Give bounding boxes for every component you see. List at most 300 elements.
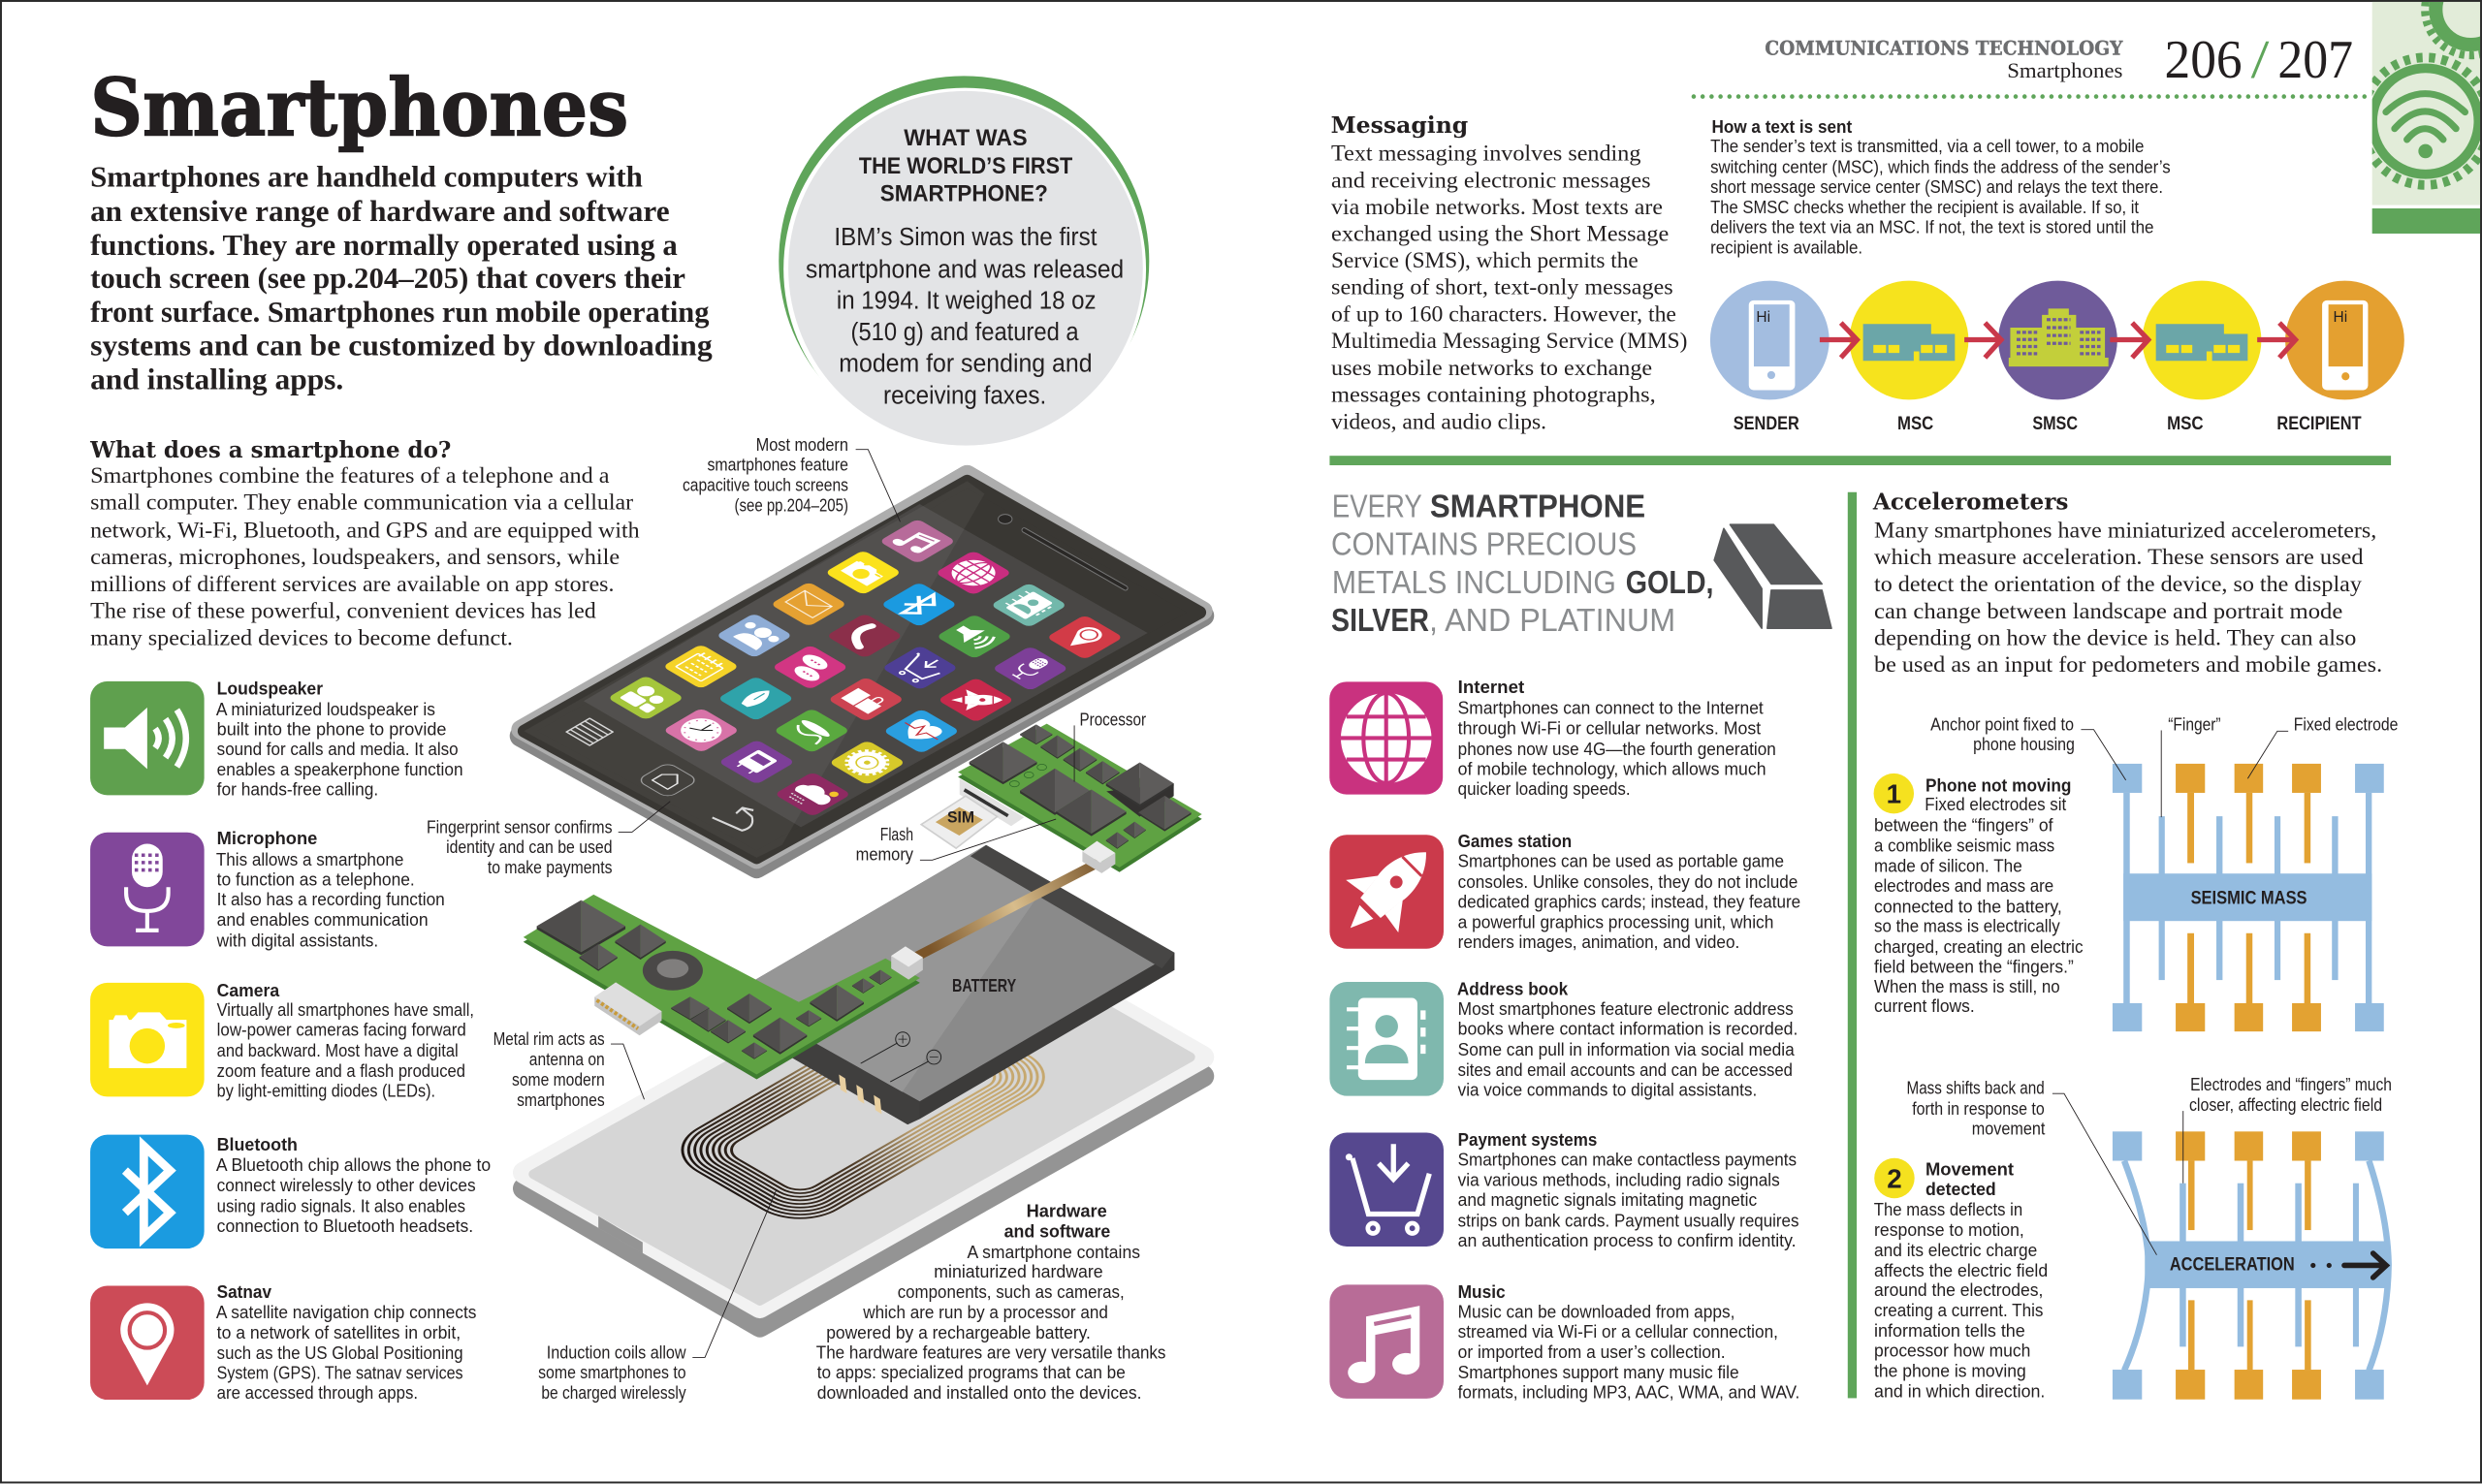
satnav text: A satellite navigation chip connects	[216, 1302, 476, 1322]
battery label: BATTERY	[952, 975, 1017, 995]
app: rocket	[934, 675, 1020, 725]
feature: payment systems	[1329, 1129, 1799, 1250]
step 2 text: around the electrodes,	[1874, 1279, 2043, 1300]
satnav text: System (GPS). The satnav services	[217, 1363, 463, 1383]
internet text: phones now use 4G—the fourth generation	[1458, 739, 1776, 759]
callout: world's first smartphone	[779, 76, 1149, 450]
microphone text: This allows a smartphone	[216, 849, 403, 869]
app: calendar	[662, 644, 740, 689]
diagram: movement detected	[1907, 1074, 2392, 1400]
bluetooth text: Bluetooth	[217, 1134, 298, 1154]
flow labels: SMSC	[2032, 414, 2078, 434]
how a text is sent: The sender’s text is transmitted, via a cell tower, to a mobile	[1710, 136, 2144, 156]
app icons	[607, 519, 1124, 817]
right circuit board: processor	[958, 724, 1202, 873]
callout answer: receiving faxes.	[883, 382, 1046, 409]
step 2	[1874, 1158, 2048, 1401]
annotation: flash memory: Flash	[880, 824, 913, 844]
body text: and receiving electronic messages	[1331, 169, 1651, 194]
app: clock	[662, 708, 740, 753]
heading: What does a smartphone do?	[89, 436, 451, 463]
body text: to detect the orientation of the device, so the display	[1874, 572, 2362, 597]
loudspeaker text: Loudspeaker	[217, 679, 323, 699]
step 1 text: Fixed electrodes sit	[1925, 794, 2066, 814]
flow diagram	[1710, 281, 2404, 434]
body text: The rise of these powerful, convenient devices has led	[90, 599, 596, 624]
feature: camera	[90, 980, 474, 1100]
intro paragraph: systems and can be customized by downloading	[90, 330, 713, 363]
feature: music	[1329, 1281, 1799, 1403]
app: location	[1046, 615, 1124, 660]
games station text: a powerful graphics processing unit, which	[1458, 911, 1773, 931]
annotation: metal rim: Metal rim acts as	[493, 1028, 605, 1049]
body text: Text messaging involves sending	[1331, 142, 1641, 167]
callout answer: in 1994. It weighed 18 oz	[837, 287, 1097, 314]
how a text is sent	[1710, 116, 2171, 258]
intro paragraph: functions. They are normally operated using a	[90, 229, 678, 262]
annotation: electrodes closer: Electrodes and “fingers” much	[2190, 1074, 2392, 1094]
satnav text: Satnav	[217, 1281, 272, 1302]
hardware and software text: The hardware features are very versatile thanks	[816, 1342, 1165, 1362]
feature: satnav	[90, 1281, 476, 1403]
microphone text: and enables communication	[217, 909, 429, 930]
step 2 text: and in which direction.	[1874, 1380, 2045, 1401]
icon: games station	[1324, 826, 1452, 954]
body text: cameras, microphones, loudspeakers, and sensors, while	[90, 545, 620, 570]
camera text: and backward. Most have a digital	[217, 1040, 459, 1060]
back button	[713, 807, 753, 831]
camera text: by light-emitting diodes (LEDs).	[217, 1080, 435, 1100]
number 1: 1	[1887, 779, 1901, 809]
annotation: fixed electrode: Fixed electrode	[2294, 713, 2398, 734]
callout question: WHAT WAS	[904, 125, 1028, 151]
callout answer: modem for sending and	[839, 351, 1093, 378]
hardware and software text: miniaturized hardware	[934, 1261, 1103, 1281]
bluetooth text: A Bluetooth chip allows the phone to	[216, 1154, 491, 1175]
precious metals statement: SILVER	[1331, 603, 1429, 639]
games station text: Smartphones can be used as portable game	[1458, 851, 1784, 871]
games station text	[1458, 831, 1800, 952]
speaker slot	[1024, 530, 1126, 588]
app: mail	[770, 582, 847, 627]
annotation: anchor point: phone housing	[1973, 734, 2075, 754]
SIM tray	[960, 778, 1024, 826]
precious metals statement: GOLD,	[1626, 565, 1714, 601]
body text: sending of short, text-only messages	[1331, 275, 1673, 300]
step 1 text: connected to the battery,	[1874, 896, 2062, 916]
sender	[1710, 281, 1830, 399]
hardware and software text: to apps: specialized programs that can be	[817, 1362, 1126, 1382]
recipient: Hi	[2334, 309, 2347, 326]
step 1 text: between the “fingers” of	[1874, 815, 2053, 836]
annotation: touch screens: smartphones feature	[707, 455, 848, 475]
icon: metal ingot	[1714, 524, 1831, 628]
step 2 text: detected	[1925, 1179, 1996, 1199]
microphone text	[216, 828, 445, 950]
annotation: fixed electrode	[2247, 713, 2398, 778]
app: address book	[990, 583, 1067, 628]
flow labels: MSC	[2167, 414, 2204, 434]
battery connector	[891, 946, 923, 980]
step 2 text: Movement	[1925, 1158, 2014, 1179]
camera text: low-power cameras facing forward	[217, 1020, 466, 1040]
address book text: via voice commands to digital assistants.	[1458, 1079, 1757, 1099]
left circuit board	[524, 895, 923, 1079]
heading: Accelerometers	[1872, 489, 2068, 516]
app: cart	[881, 646, 959, 690]
step 1 text: When the mass is still, no	[1874, 976, 2060, 996]
callout question: SMARTPHONE?	[880, 180, 1048, 206]
app: microphone	[992, 646, 1069, 691]
feature: address book	[1329, 978, 1798, 1099]
annotation: touch screens: capacitive touch screens	[683, 475, 848, 495]
annotation: anchor point: Anchor point fixed to	[1930, 713, 2074, 734]
annotation: fingerprint sensor: to make payments	[488, 857, 613, 877]
icon: music	[1329, 1284, 1444, 1399]
app: phone	[826, 614, 904, 658]
hardware and software text: and software	[1004, 1221, 1110, 1242]
body text: exchanged using the Short Message	[1331, 221, 1669, 246]
annotation: induction coils: some smartphones to	[538, 1362, 686, 1382]
title: Smartphones	[90, 62, 628, 155]
music text: Smartphones support many music file	[1458, 1362, 1739, 1382]
page numbers: 207	[2277, 30, 2353, 90]
icon: camera	[90, 983, 205, 1096]
bluetooth text: connect wirelessly to other devices	[217, 1175, 476, 1195]
intro paragraph: and installing apps.	[90, 363, 343, 396]
microphone text: Microphone	[217, 828, 317, 848]
body text	[1331, 142, 1687, 434]
annotation: flash memory	[856, 819, 1056, 865]
internet text: through Wi-Fi or cellular networks. Most	[1458, 718, 1761, 739]
exploded phone illustration	[521, 475, 1203, 1326]
hardware and software text: powered by a rechargeable battery.	[826, 1322, 1091, 1342]
bluetooth text	[216, 1134, 491, 1236]
music text: Music can be downloaded from apps,	[1458, 1301, 1734, 1321]
loudspeaker text: A miniaturized loudspeaker is	[216, 699, 435, 719]
payment systems text: and magnetic signals imitating magnetic	[1458, 1189, 1757, 1210]
loudspeaker text: built into the phone to provide	[217, 718, 446, 739]
address book text	[1457, 978, 1798, 1099]
intro paragraph: an extensive range of hardware and software	[90, 195, 670, 228]
blue comb structure	[2113, 764, 2384, 1031]
music text: or imported from a user’s collection.	[1458, 1342, 1726, 1362]
step 1 text: current flows.	[1874, 995, 1975, 1016]
app: health	[883, 709, 960, 754]
satnav text	[216, 1281, 476, 1403]
step 2 text: information tells the	[1874, 1320, 2025, 1341]
hardware and software text: downloaded and installed onto the devices.	[817, 1382, 1141, 1403]
body text	[1874, 518, 2382, 678]
annotation: mass shifts: forth in response to	[1912, 1098, 2045, 1119]
precious metals statement: METALS INCLUDING	[1332, 565, 1616, 601]
how a text is sent: The SMSC checks whether the recipient is available. If so, it	[1710, 197, 2139, 217]
music text: Music	[1458, 1281, 1506, 1302]
SIM card: SIM	[947, 808, 974, 826]
body text: uses mobile networks to exchange	[1331, 356, 1652, 381]
step 1 text: field between the “fingers.”	[1874, 956, 2074, 976]
running head: COMMUNICATIONS TECHNOLOGY	[1765, 38, 2123, 60]
orange fixed electrodes	[2176, 764, 2321, 1031]
section: messaging	[1331, 111, 2404, 434]
step 2 text: The mass deflects in	[1874, 1199, 2022, 1219]
step 2 text: creating a current. This	[1874, 1300, 2043, 1320]
microphone text: to function as a telephone.	[217, 869, 415, 890]
SMSC	[1998, 281, 2117, 399]
recipient	[2285, 281, 2404, 399]
body text: be used as an input for pedometers and mobile games.	[1874, 652, 2382, 678]
payment systems text	[1458, 1129, 1799, 1250]
games station text: renders images, animation, and video.	[1458, 931, 1739, 952]
icon: bluetooth	[90, 1135, 205, 1248]
callout answer: smartphone and was released	[806, 256, 1124, 283]
feature: microphone	[90, 828, 445, 950]
icon: satnav	[90, 1286, 205, 1400]
front camera	[999, 515, 1012, 523]
app: settings	[829, 740, 906, 785]
page numbers	[2164, 30, 2353, 90]
hardware and software text: components, such as cameras,	[898, 1281, 1125, 1302]
address book text: Most smartphones feature electronic address	[1458, 998, 1794, 1019]
heading: Messaging	[1331, 111, 1468, 139]
diagram: phone not moving	[1930, 713, 2398, 1031]
ribbon cable	[915, 863, 1098, 958]
payment systems text: strips on bank cards. Payment usually requires	[1458, 1210, 1799, 1230]
satnav text: such as the US Global Positioning	[217, 1342, 463, 1363]
app: bags	[827, 677, 905, 722]
body text: millions of different services are available on app stores.	[90, 572, 614, 597]
menu button	[566, 718, 613, 745]
callout answer: IBM’s Simon was the first	[834, 224, 1097, 251]
intro paragraph	[90, 161, 713, 396]
icon: internet	[1329, 681, 1443, 795]
number 2	[1874, 1158, 1915, 1198]
annotation: mass shifts: movement	[1972, 1119, 2045, 1139]
body text: depending on how the device is held. They can also	[1874, 626, 2356, 651]
annotation: metal rim	[493, 1028, 644, 1110]
arrow: acceleration direction	[2310, 1253, 2386, 1278]
body text: Smartphones combine the features of a telephone and a	[90, 463, 610, 489]
feature: bluetooth	[90, 1134, 491, 1248]
loudspeaker text: enables a speakerphone function	[217, 759, 463, 779]
camera text: zoom feature and a flash produced	[217, 1060, 465, 1081]
left board chips	[537, 900, 892, 1059]
step 1 text: electrodes and mass are	[1874, 875, 2053, 896]
how a text is sent: delivers the text via an MSC. If not, the text is stored until the	[1710, 216, 2154, 237]
step 2 text: the phone is moving	[1874, 1360, 2026, 1380]
internet text: quicker loading speeds.	[1458, 778, 1631, 799]
step 2 text: and its electric charge	[1874, 1240, 2037, 1260]
annotation: metal rim: smartphones	[517, 1089, 605, 1110]
intro paragraph: front surface. Smartphones run mobile operating	[90, 296, 709, 329]
music text: streamed via Wi-Fi or a cellular connection,	[1458, 1321, 1778, 1342]
page numbers: /	[2251, 30, 2270, 90]
flow labels: SENDER	[1734, 414, 1799, 434]
induction coil	[661, 996, 1065, 1231]
address book text: books where contact information is recorded.	[1458, 1019, 1798, 1039]
bluetooth text: using radio signals. It also enables	[217, 1196, 465, 1216]
address book text: Some can pull in information via social media	[1458, 1039, 1796, 1059]
payment systems text: an authentication process to confirm identity.	[1458, 1230, 1797, 1250]
annotation: fingerprint sensor	[427, 802, 670, 877]
annotation: processor: Processor	[1079, 709, 1146, 729]
section: what does a smartphone do	[89, 436, 640, 650]
SIM card	[921, 796, 998, 848]
app: music	[878, 519, 956, 564]
microphone text: with digital assistants.	[216, 930, 378, 950]
annotation: touch screens: (see pp.204–205)	[735, 494, 848, 515]
body text: Multimedia Messaging Service (MMS)	[1331, 329, 1687, 354]
satnav text: to a network of satellites in orbit,	[217, 1322, 461, 1342]
intro paragraph: Smartphones are handheld computers with	[90, 161, 643, 194]
annotation: touch screens: Most modern	[756, 434, 848, 455]
precious metals statement: CONTAINS PRECIOUS	[1331, 526, 1637, 562]
back case	[524, 923, 1203, 1326]
icon: microphone	[90, 833, 205, 946]
battery	[731, 845, 1174, 1124]
internet text: Internet	[1458, 677, 1524, 697]
app: globe	[935, 551, 1012, 595]
annotation: metal rim: some modern	[512, 1069, 605, 1089]
callout circle	[779, 76, 1149, 450]
annotation: induction coils: be charged wirelessly	[541, 1382, 686, 1403]
page header	[1694, 0, 2482, 234]
app: pen	[717, 676, 794, 721]
running head: Smartphones	[2007, 58, 2122, 82]
games station text: Games station	[1458, 831, 1572, 851]
app: speaker	[936, 614, 1013, 659]
how a text is sent: How a text is sent	[1712, 116, 1852, 137]
app: weather	[774, 772, 851, 817]
body text: small computer. They enable communication via a cellular	[90, 490, 633, 516]
payment systems text: Smartphones can make contactless payments	[1458, 1150, 1797, 1170]
annotation: fingerprint sensor: identity and can be used	[446, 837, 613, 857]
annotation: anchor point	[1930, 713, 2126, 780]
step 1 text: a comblike seismic mass	[1874, 835, 2054, 855]
how a text is sent: short message service center (SMSC) and relays the text there.	[1710, 176, 2163, 197]
section: accelerometers	[1848, 489, 2398, 1401]
step 1 text: so the mass is electrically	[1874, 916, 2061, 936]
annotation: mass shifts: Mass shifts back and	[1907, 1077, 2045, 1097]
hardware and software text: which are run by a processor and	[862, 1302, 1108, 1322]
app: train	[718, 740, 795, 784]
callout answer	[806, 224, 1124, 409]
step 1 text: charged, creating an electric	[1874, 936, 2084, 957]
body text: Service (SMS), which permits the	[1331, 248, 1639, 273]
step 1	[1874, 774, 2084, 1016]
sender: Hi	[1756, 309, 1770, 326]
body text: videos, and audio clips.	[1331, 409, 1546, 434]
arrows	[1820, 323, 2296, 358]
feature: games station	[1324, 826, 1800, 954]
annotation: processor	[1074, 709, 1146, 782]
hardware and software text: A smartphone contains	[968, 1242, 1140, 1262]
how a text is sent: switching center (MSC), which finds the address of the sender’s	[1710, 156, 2171, 176]
app: contacts	[716, 613, 793, 658]
payment systems text: via various methods, including radio signals	[1458, 1169, 1780, 1189]
step 1 text: Phone not moving	[1925, 774, 2071, 795]
left connector	[594, 983, 661, 1035]
loudspeaker text	[216, 679, 463, 799]
body text: network, Wi-Fi, Bluetooth, and GPS and are equipped with	[90, 518, 640, 543]
how a text is sent: recipient is available.	[1710, 237, 1862, 258]
address book text: Address book	[1457, 978, 1569, 998]
body text: via mobile networks. Most texts are	[1331, 195, 1663, 220]
internet text: Smartphones can connect to the Internet	[1458, 697, 1764, 717]
orange fixed electrodes	[2176, 1131, 2321, 1400]
annotation: flash memory: memory	[856, 844, 914, 865]
annotation: touch screens	[683, 434, 900, 521]
blue comb structure, deflected	[2113, 1131, 2390, 1400]
feature: internet	[1329, 677, 1776, 799]
corner tab with gears and wifi icon	[2362, 0, 2482, 234]
app: video call	[607, 676, 684, 720]
annotation: induction coils: Induction coils allow	[547, 1342, 686, 1362]
annotation: fingerprint sensor: Fingerprint sensor confirms	[427, 816, 613, 837]
bluetooth text: connection to Bluetooth headsets.	[217, 1216, 473, 1236]
app: camera	[824, 550, 902, 595]
step 1 text: made of silicon. The	[1874, 855, 2022, 875]
loudspeaker text: for hands-free calling.	[217, 778, 378, 799]
phone body	[521, 475, 1203, 868]
body text: which measure acceleration. These sensors are used	[1874, 545, 2364, 570]
satnav text: are accessed through apps.	[217, 1382, 418, 1403]
music text: formats, including MP3, AAC, WMA, and WAV.	[1458, 1382, 1799, 1403]
callout question: THE WORLD’S FIRST	[859, 153, 1073, 179]
microphone text: It also has a recording function	[217, 889, 445, 909]
MSC	[1850, 281, 1968, 399]
body text: messages containing photographs,	[1331, 383, 1656, 408]
annotation: electrodes closer: closer, affecting electric field	[2189, 1094, 2382, 1115]
icon: address book	[1329, 982, 1444, 1096]
step 2 text: affects the electric field	[1874, 1260, 2048, 1280]
games station text: consoles. Unlike consoles, they do not include	[1458, 871, 1798, 892]
camera text	[217, 980, 474, 1100]
flow labels: MSC	[1897, 414, 1933, 434]
page numbers: 206	[2164, 30, 2243, 90]
precious metals statement	[1331, 489, 1714, 639]
internet text	[1458, 677, 1776, 799]
annotation: finger: “Finger”	[2168, 713, 2221, 734]
camera text: Virtually all smartphones have small,	[217, 999, 474, 1020]
internet text: of mobile technology, which allows much	[1458, 758, 1766, 778]
acceleration label: ACCELERATION	[2170, 1255, 2295, 1276]
games station text: dedicated graphics cards; instead, they feature	[1458, 892, 1800, 912]
app: chat	[772, 645, 848, 690]
hardware and software text	[816, 1200, 1165, 1403]
app: brush	[773, 708, 850, 753]
icon: payment systems	[1329, 1132, 1444, 1247]
step 1 text	[1874, 774, 2084, 1016]
feature: loudspeaker	[90, 679, 463, 799]
annotation: electrodes closer	[2183, 1074, 2392, 1184]
body text: Many smartphones have miniaturized accelerometers,	[1874, 518, 2376, 543]
annotation: induction coils	[538, 1189, 777, 1403]
music text	[1458, 1281, 1799, 1403]
body text: can change between landscape and portrait mode	[1874, 599, 2342, 624]
callout question	[859, 125, 1073, 206]
camera text: Camera	[217, 980, 280, 1000]
precious metals statement: , AND PLATINUM	[1429, 603, 1675, 639]
annotation: metal rim: antenna on	[529, 1049, 605, 1069]
flow labels: RECIPIENT	[2276, 414, 2362, 434]
hardware and software text: Hardware	[1027, 1200, 1107, 1220]
callout answer: (510 g) and featured a	[851, 319, 1079, 346]
icon: loudspeaker	[90, 681, 205, 795]
seismic mass label: SEISMIC MASS	[2191, 889, 2307, 909]
intro paragraph: touch screen (see pp.204–205) that covers their	[90, 262, 685, 295]
app: bluetooth	[880, 582, 958, 627]
